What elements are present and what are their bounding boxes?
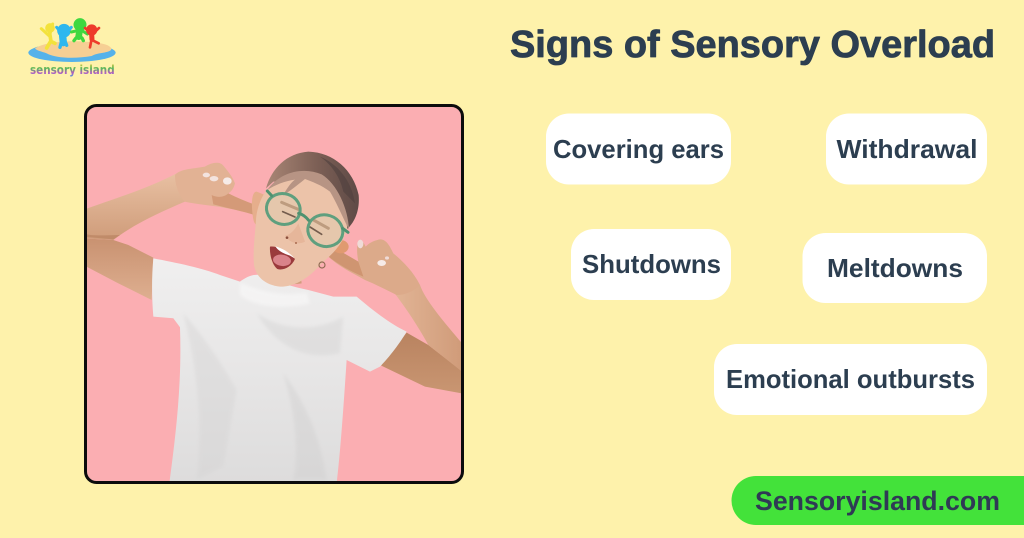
sign: Shutdowns: Shutdowns — [582, 249, 721, 279]
right ear — [335, 240, 349, 254]
sign: Shutdowns — [571, 229, 731, 300]
closed eyes — [283, 212, 322, 234]
nose — [285, 223, 305, 243]
icon: green child — [71, 20, 87, 41]
website badge — [731, 476, 1024, 525]
sign: Withdrawal: Withdrawal — [836, 134, 978, 164]
face — [254, 177, 347, 287]
sign: Emotional outbursts — [714, 344, 987, 415]
sign: Meltdowns: Meltdowns — [827, 253, 963, 283]
girl's right arm and hand — [327, 239, 465, 394]
shirt folds — [188, 320, 341, 426]
website badge: Sensoryisland.com — [755, 486, 1000, 516]
hair — [266, 152, 359, 229]
logo wordmark: sensory island — [30, 63, 115, 77]
sign: Withdrawal — [826, 114, 987, 184]
right hand — [327, 239, 420, 295]
left ear — [252, 192, 264, 224]
fringe — [267, 171, 349, 230]
photo panel: girl covering ears — [83, 105, 465, 483]
head — [252, 152, 359, 287]
girl's left arm and hand — [83, 163, 260, 300]
logo: sensory island — [28, 20, 116, 77]
mouth — [270, 247, 295, 269]
neck — [295, 280, 302, 284]
glasses — [262, 189, 348, 251]
left hand — [175, 162, 236, 210]
sign: Meltdowns — [802, 233, 987, 303]
icon: island with water — [28, 41, 116, 62]
icon: red child — [85, 26, 99, 47]
earring — [319, 262, 325, 268]
title: Signs of Sensory Overload — [510, 24, 995, 66]
sign: Emotional outbursts: Emotional outbursts — [726, 364, 975, 394]
shirt — [152, 258, 407, 483]
icon: blue child — [57, 25, 71, 47]
icon: yellow child — [41, 24, 55, 48]
sign: Covering ears — [546, 114, 731, 184]
sign: Covering ears: Covering ears — [553, 134, 724, 164]
eyebrows — [282, 202, 328, 228]
